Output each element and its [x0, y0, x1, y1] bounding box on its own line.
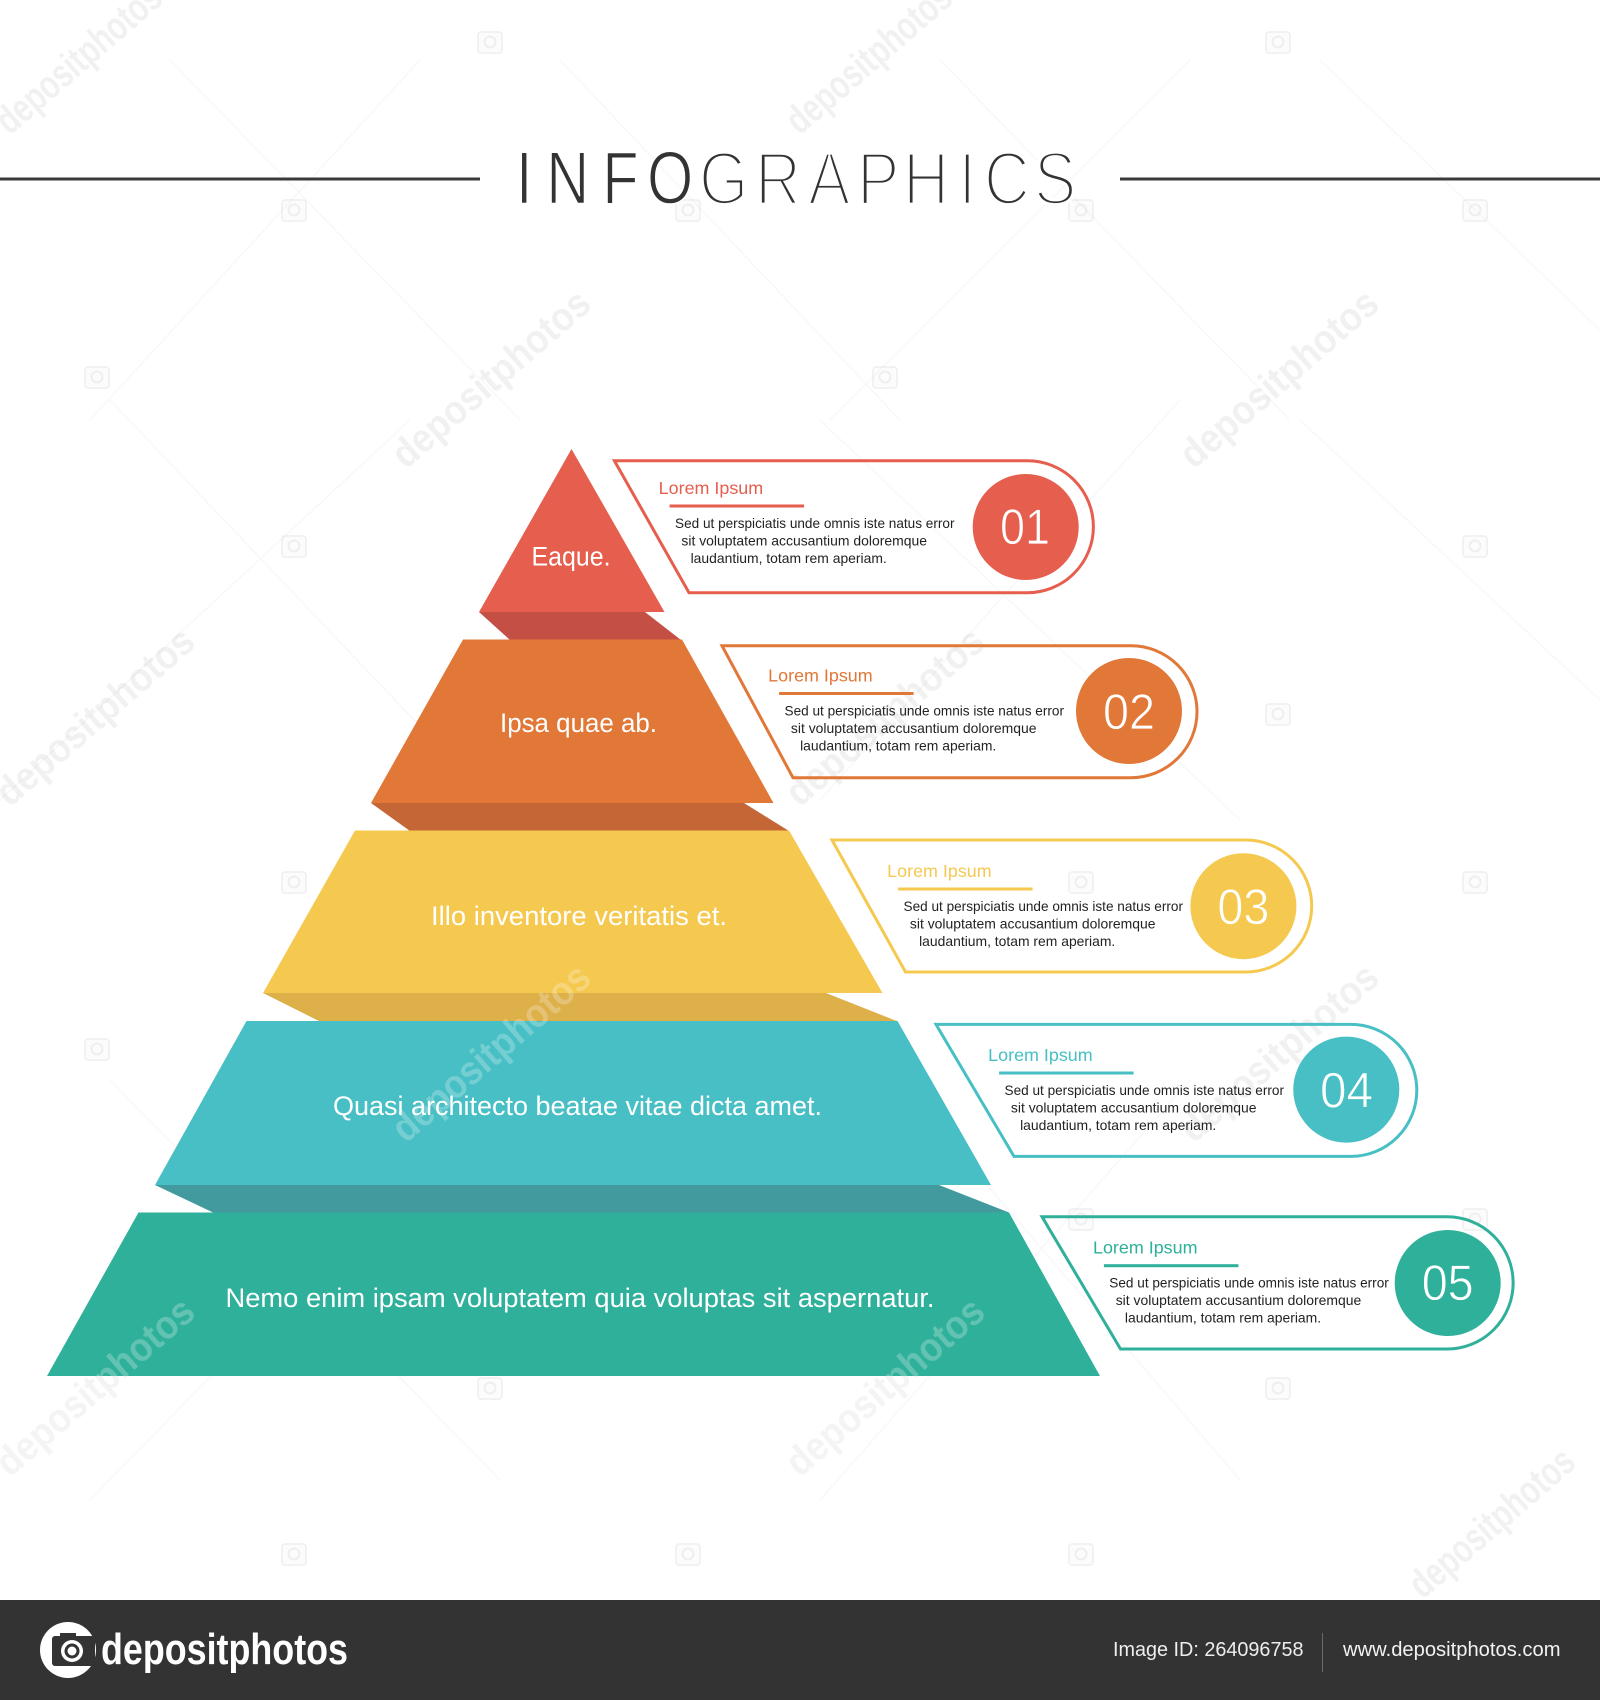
callout text 01	[659, 478, 955, 566]
callout text 02: sit voluptatem accusantium doloremque	[791, 720, 1037, 736]
label 2: Ipsa quae ab.	[500, 708, 657, 738]
callout text 01: sit voluptatem accusantium doloremque	[681, 532, 927, 548]
callout text 01: laudantium, totam rem aperiam.	[691, 550, 887, 566]
icon: camera logo	[40, 1622, 96, 1678]
badge 01	[973, 474, 1079, 580]
title: GRAPHICS	[699, 137, 1076, 221]
badge 05	[1395, 1230, 1501, 1336]
image id: Image ID: 264096758	[1113, 1639, 1304, 1661]
title: INFO	[516, 137, 693, 220]
callout text 03: Lorem Ipsum	[887, 861, 992, 881]
tier 5: teal	[47, 1212, 1100, 1376]
tier 1: red triangle	[479, 449, 664, 612]
callout text 03: Sed ut perspiciatis unde omnis iste natus error	[904, 898, 1183, 914]
callout text 04: sit voluptatem accusantium doloremque	[1011, 1100, 1257, 1116]
number 05: 05	[1422, 1255, 1474, 1311]
infographic canvas: depositphotos	[777, 1289, 993, 1485]
infographic canvas: depositphotos	[777, 619, 993, 815]
callout text 03: laudantium, totam rem aperiam.	[919, 933, 1115, 949]
callout 05	[1042, 1217, 1513, 1349]
callout text 02: Lorem Ipsum	[768, 666, 873, 686]
tier 3 shadow	[263, 993, 898, 1022]
label 3: Illo inventore veritatis et.	[431, 901, 727, 931]
callout text 04: Sed ut perspiciatis unde omnis iste natus error	[1004, 1082, 1284, 1098]
tier 2 shadow	[371, 803, 789, 831]
website: www.depositphotos.com	[1342, 1639, 1560, 1661]
infographic canvas: depositphotos	[1171, 281, 1387, 477]
callout text 04: laudantium, totam rem aperiam.	[1020, 1117, 1216, 1133]
callout text 04: Lorem Ipsum	[988, 1045, 1093, 1065]
callout text 04	[988, 1045, 1284, 1133]
tier 2: orange	[371, 640, 774, 803]
callout text 05: sit voluptatem accusantium doloremque	[1116, 1292, 1362, 1308]
callout text 02: Sed ut perspiciatis unde omnis iste natus error	[784, 702, 1064, 718]
badge 04	[1293, 1037, 1399, 1143]
infographic canvas: depositphotos	[383, 955, 599, 1151]
callout 01	[614, 461, 1093, 593]
callout text 02: laudantium, totam rem aperiam.	[800, 738, 996, 754]
callout 03	[832, 840, 1312, 972]
tier 1 shadow	[479, 612, 681, 640]
callout text 02	[768, 666, 1064, 754]
badge 03	[1190, 853, 1296, 959]
callout 04	[936, 1024, 1417, 1156]
pyramid	[47, 449, 1100, 1376]
footer bar	[0, 1600, 1600, 1700]
number 03: 03	[1217, 879, 1269, 935]
callout text 03	[887, 861, 1183, 949]
label 4: Quasi architecto beatae vitae dicta amet.	[333, 1091, 822, 1121]
label 5: Nemo enim ipsam voluptatem quia voluptas sit aspernatur.	[226, 1283, 934, 1313]
callout text 05	[1093, 1238, 1389, 1326]
callout text 05: Sed ut perspiciatis unde omnis iste natus error	[1109, 1275, 1389, 1291]
number 02: 02	[1103, 684, 1155, 740]
badge 02	[1076, 658, 1182, 764]
number 01: 01	[1000, 499, 1050, 555]
callout 02	[722, 646, 1197, 778]
callout text 05: Lorem Ipsum	[1093, 1238, 1198, 1258]
label 1: Eaque.	[532, 542, 610, 572]
callout text 03: sit voluptatem accusantium doloremque	[910, 916, 1156, 932]
infographic canvas: depositphotos	[1171, 955, 1387, 1151]
title	[0, 137, 1600, 221]
infographic canvas: depositphotos	[777, 1289, 993, 1485]
tier 3: yellow	[263, 830, 882, 993]
callout text 05: laudantium, totam rem aperiam.	[1125, 1310, 1321, 1326]
infographic canvas: depositphotos	[383, 281, 599, 477]
tier 4 shadow	[155, 1185, 1009, 1212]
tier 4: cyan	[155, 1021, 991, 1185]
number 04: 04	[1320, 1062, 1373, 1118]
callout text 01: Lorem Ipsum	[659, 478, 763, 498]
logo wordmark: depositphotos	[101, 1625, 348, 1674]
callout text 01: Sed ut perspiciatis unde omnis iste natus error	[675, 515, 955, 531]
